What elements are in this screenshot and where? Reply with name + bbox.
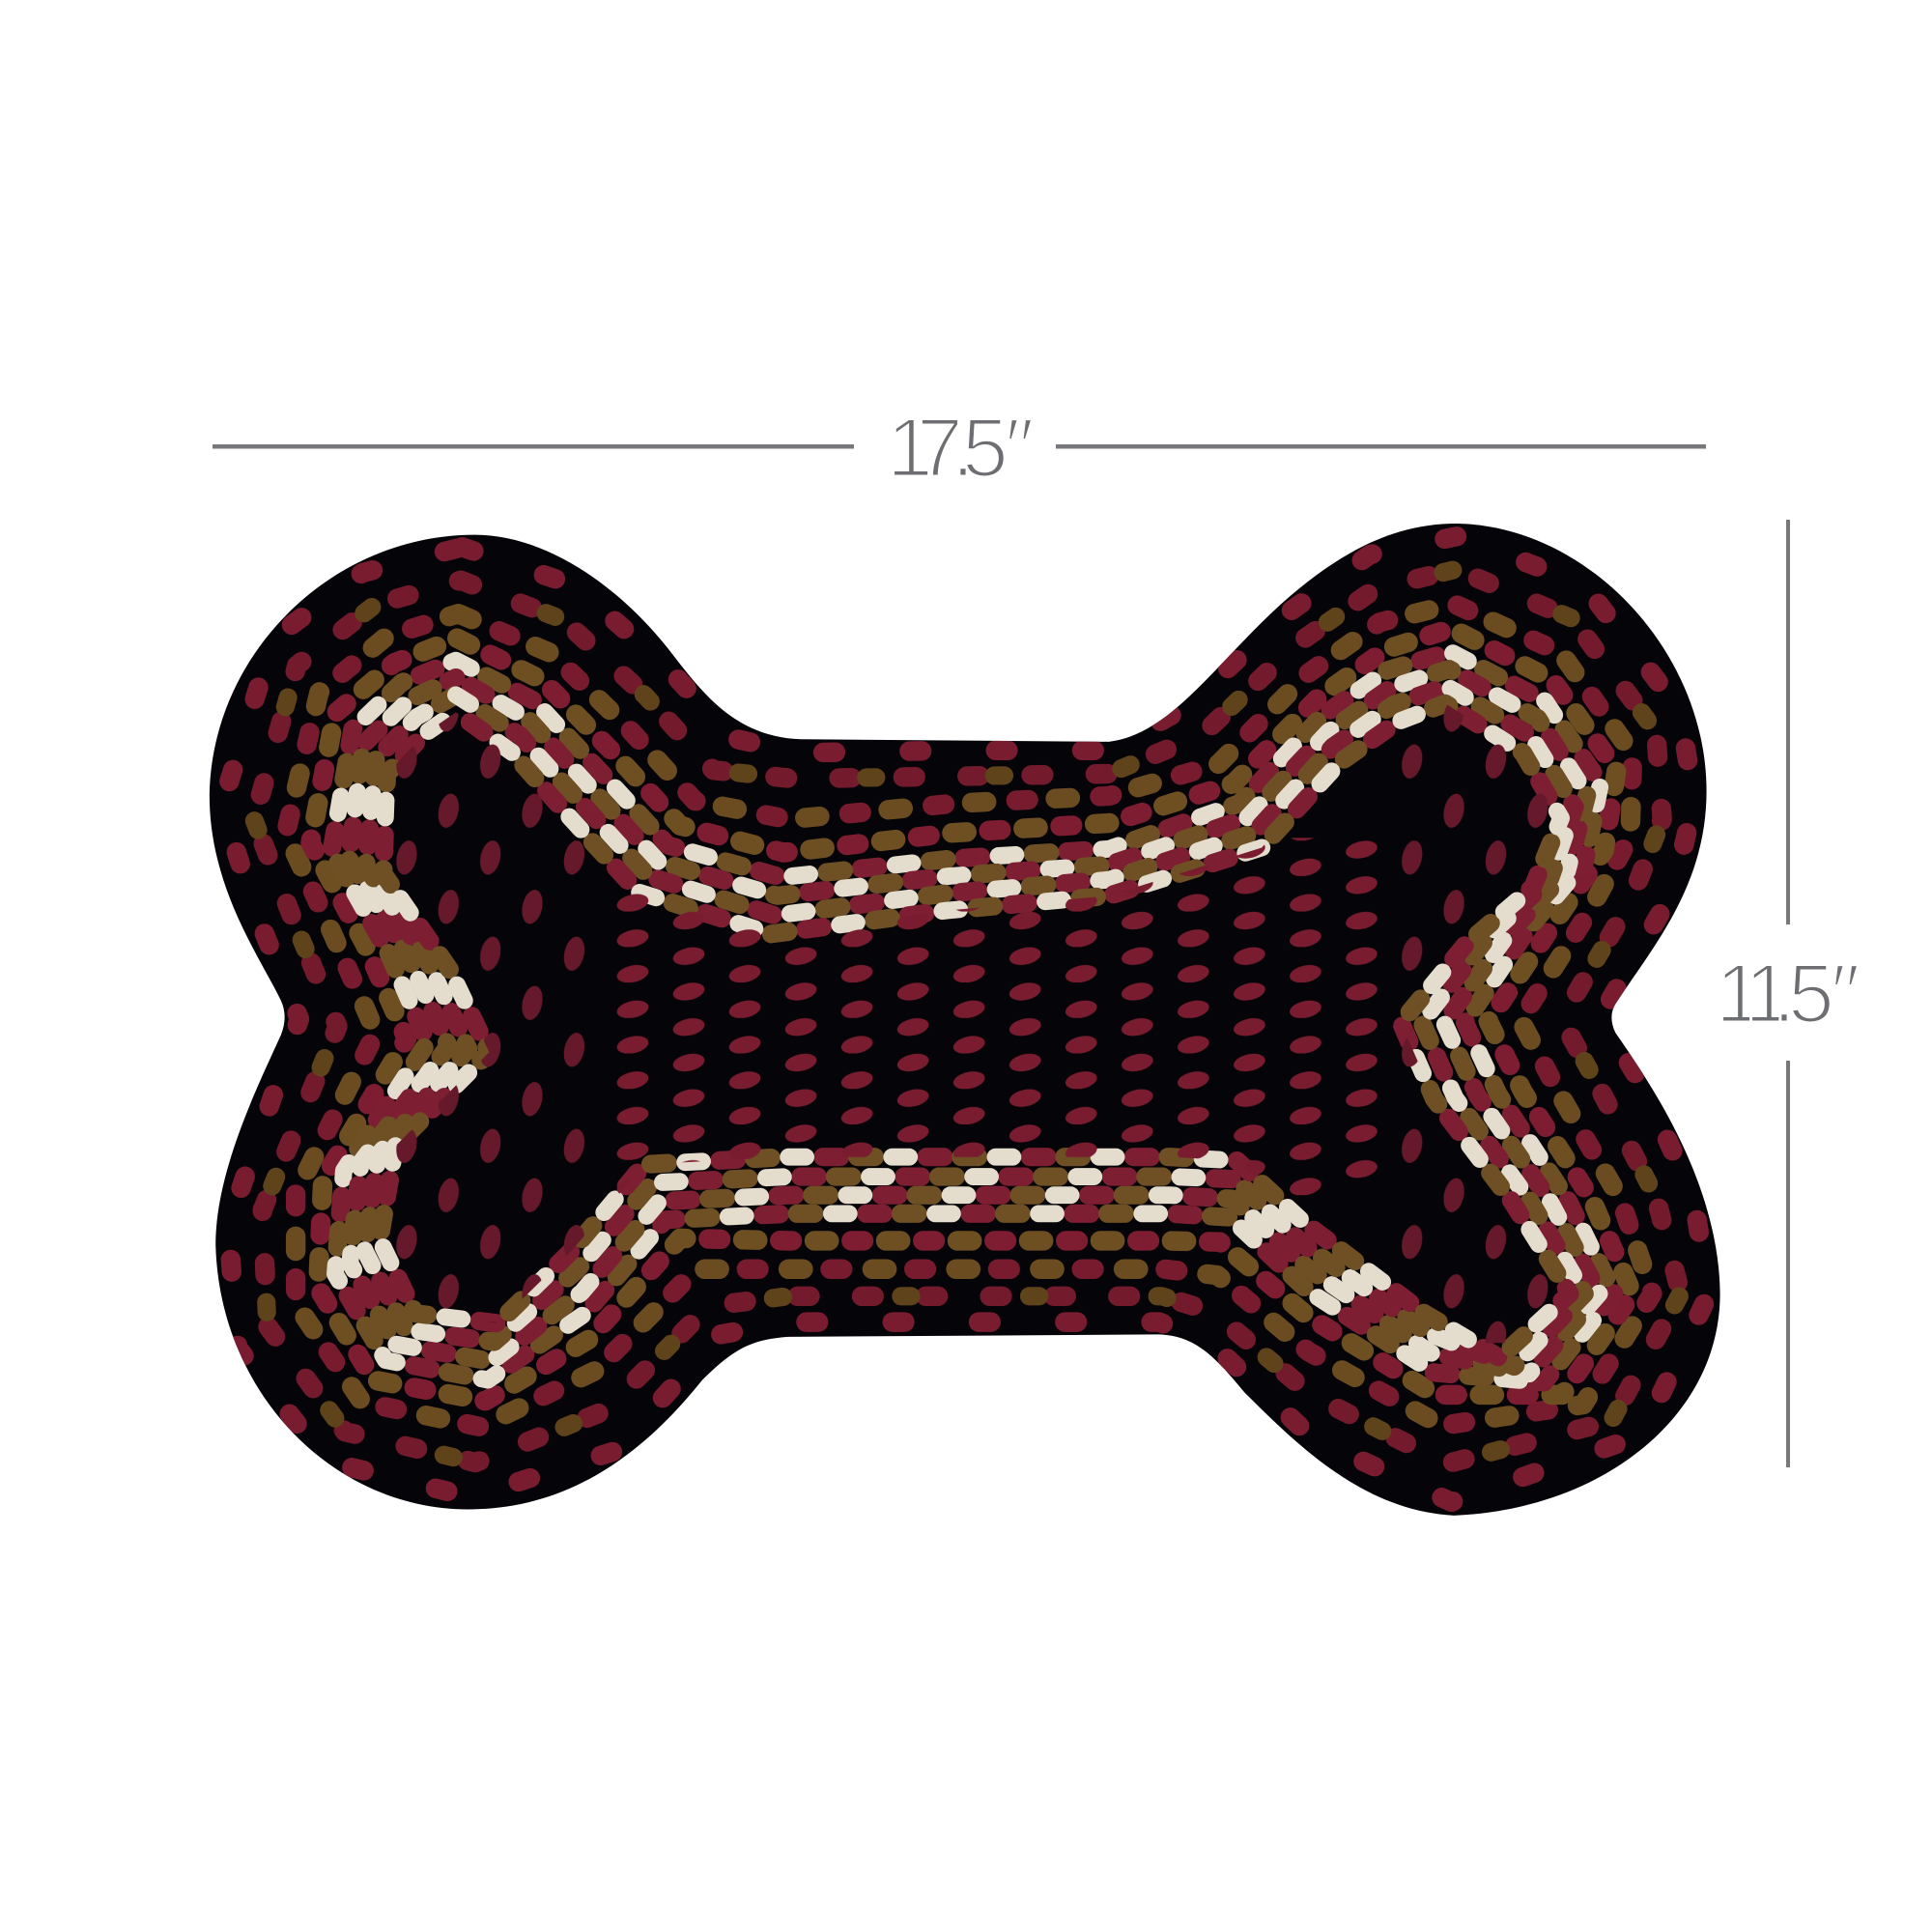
outer ring: sparse burgundy stitches [222,536,1709,1502]
height line top [1786,520,1790,924]
braid row two: cream [349,669,1600,1374]
fourth ring: gold stitches [310,629,1633,1401]
width line left [213,444,854,448]
braid row two: burgundy [349,669,1600,1374]
third ring: gold stitches [286,604,1652,1427]
right lobe stitches [1401,705,1548,1343]
braid row four: gold [380,703,1570,1358]
braid row four: burgundy [380,703,1570,1358]
height line bottom [1786,1061,1790,1467]
width label: 17.5″ [887,402,1034,495]
left lobe stitches [396,712,585,1323]
second ring: burgundy stitches [254,569,1681,1463]
fourth ring: burgundy stitches [310,629,1633,1401]
height label: 11.5″ [1716,948,1860,1040]
second ring: gold accents [254,569,1681,1463]
braid row two: gold [349,669,1600,1374]
braid row one: cream [331,652,1614,1382]
width line right [1056,444,1706,448]
braid row three: burgundy [365,686,1584,1367]
braid row one: gold [331,652,1614,1382]
braid row one: burgundy [331,652,1614,1382]
braid row three: gold [365,686,1584,1367]
third ring: burgundy stitches [286,604,1652,1427]
braid row four: cream [380,703,1570,1358]
centre stitches [604,838,1390,1195]
rug: braided bone-shaped mat [210,524,1720,1516]
braid rings clipped to the bone [222,536,1709,1502]
braid row three: cream [365,686,1584,1367]
width dimension: 17.5 inches [213,402,1706,495]
rug base: black bone shape [210,524,1720,1516]
inner field clipped by the braid [396,705,1548,1343]
height dimension: 11.5 inches [1716,520,1860,1467]
